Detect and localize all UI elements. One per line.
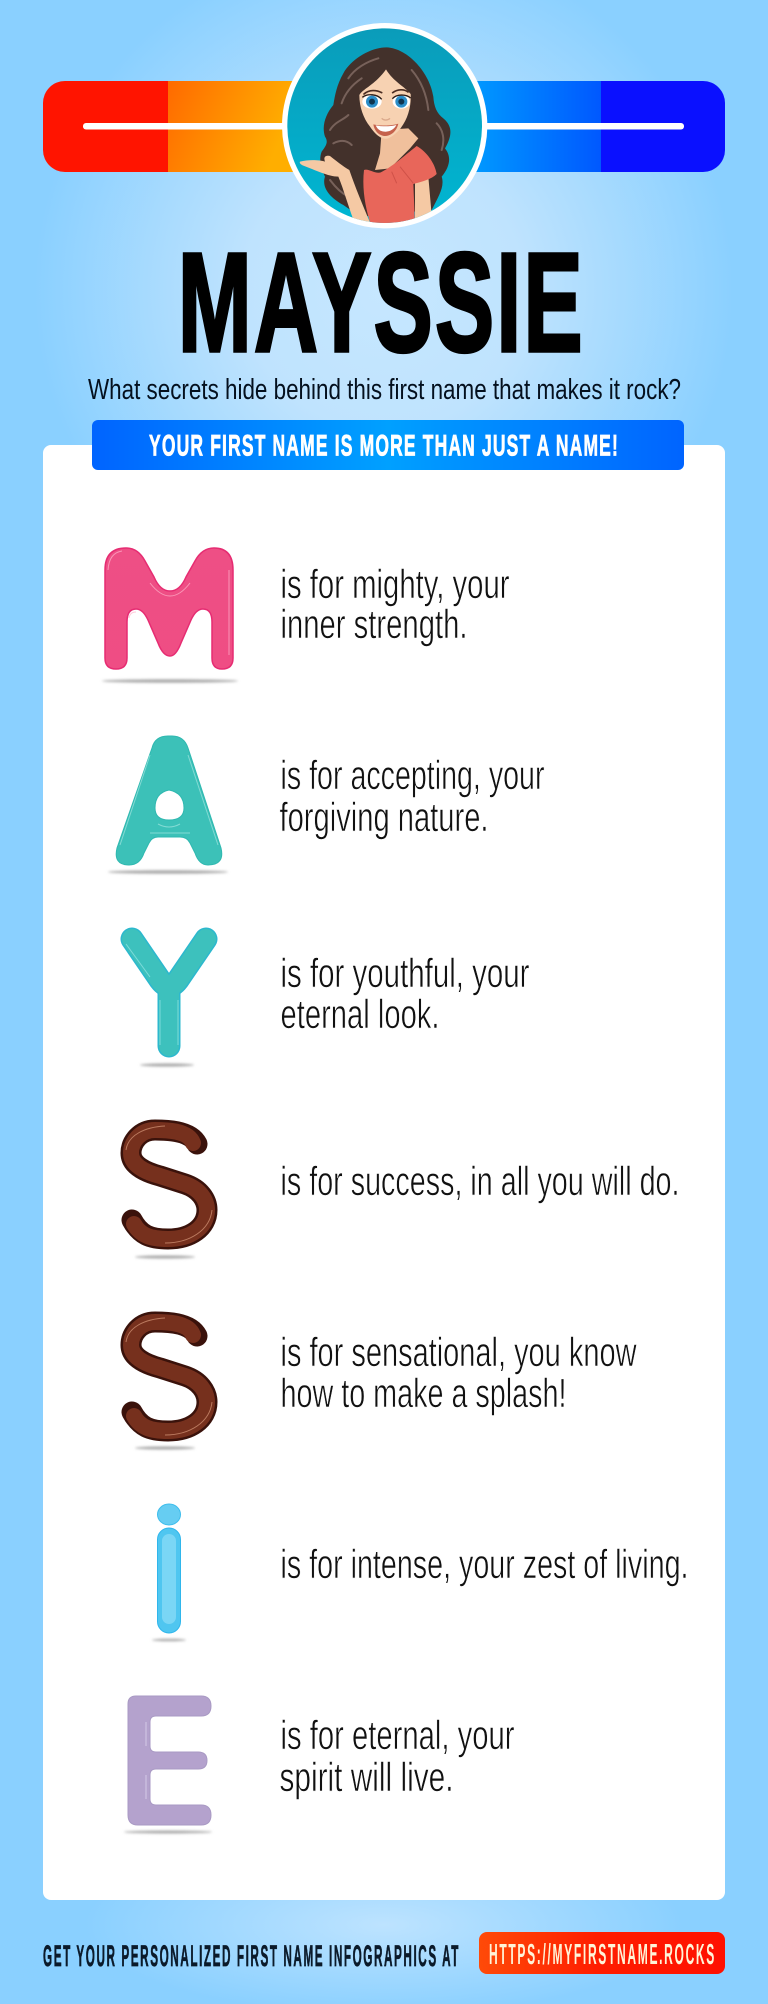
- is for accepting: forgiving nature.: [280, 794, 488, 840]
- banner: [92, 420, 684, 470]
- header colour bar: [43, 81, 725, 172]
- letter S: [126, 1126, 212, 1259]
- coral shirt: [363, 146, 437, 224]
- letter A: [108, 736, 228, 874]
- eyebrows: [364, 90, 408, 94]
- face: [359, 69, 411, 139]
- is for accepting: [280, 752, 544, 840]
- letter E: [124, 1696, 212, 1834]
- is for mighty: inner strength.: [280, 601, 468, 647]
- right arm: [415, 179, 432, 218]
- is for sensational: how to make a splash!: [280, 1370, 566, 1416]
- smile: [373, 124, 398, 136]
- is for youthful: is for youthful, your: [280, 950, 530, 996]
- letter i: [152, 1504, 186, 1641]
- letter S: [126, 1318, 212, 1450]
- letter Y: [126, 939, 206, 1067]
- is for eternal: is for eternal, your: [280, 1712, 514, 1758]
- footer url button: [479, 1932, 725, 1974]
- portrait: cartoon woman in circle: [282, 23, 487, 228]
- is for mighty: [280, 561, 510, 647]
- is for eternal: [280, 1712, 514, 1800]
- letter M: [102, 548, 238, 683]
- is for accepting: is for accepting, your: [280, 752, 544, 798]
- is for youthful: eternal look.: [280, 991, 440, 1037]
- eyes: [362, 95, 382, 109]
- is for mighty: is for mighty, your: [280, 561, 510, 607]
- is for eternal: spirit will live.: [280, 1754, 454, 1800]
- neck: [375, 128, 418, 170]
- white content panel: [43, 445, 725, 1900]
- nose: [382, 118, 390, 120]
- is for youthful: [280, 950, 530, 1037]
- hair: [320, 47, 450, 217]
- left arm and hand: [300, 156, 371, 224]
- is for sensational: [280, 1329, 637, 1416]
